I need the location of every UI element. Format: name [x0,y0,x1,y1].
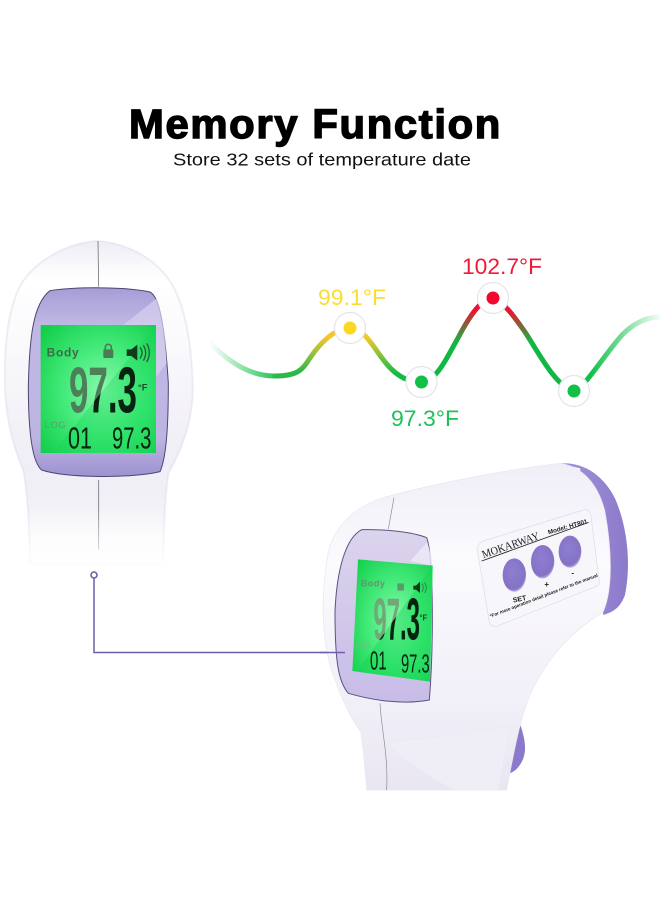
connector end over screen [320,652,345,654]
speaker icon [127,343,149,362]
degree F unit: °F [138,383,148,393]
lock icon [103,344,113,358]
marker: fourth point [558,376,590,406]
main reading: 97.3 [69,354,137,427]
body seam [380,498,394,790]
label: 102.7F: 102.7°F [462,254,542,279]
trigger [507,722,525,773]
brand underline [482,522,589,561]
control label panel [477,510,599,626]
purple rear band [560,463,628,615]
label: 97.3F: 97.3°F [391,406,459,431]
LCD lit diagonal [357,566,433,682]
degree F unit: °F [419,613,428,622]
SET button [503,558,526,592]
lock icon [397,583,404,591]
LCD label: Body: Body [47,345,79,359]
title: Memory Function [129,101,502,147]
manual note: *For more operation detail please refer to the manual [489,573,598,619]
minus button [559,536,581,568]
connector line [91,572,345,652]
speaker icon [413,582,426,593]
LCD screen [41,325,156,453]
bottom fade [0,510,210,572]
marker: 102.7F [478,282,508,314]
log index: 01 [68,422,92,456]
LOG label: LOG [45,420,66,430]
bezel glare [123,298,167,377]
front thermometer [5,241,193,563]
screen bezel [28,288,168,476]
thermometer body [5,241,193,563]
LCD screen [352,559,433,682]
plus button [531,545,554,578]
temperature curve [210,298,660,392]
thermometer body [323,463,610,790]
marker: 97.3F [406,366,437,398]
LOG label: LOG [355,641,371,650]
body seam [97,241,100,550]
angled thermometer [323,463,628,790]
bezel glare [410,542,433,566]
brand name: MOKARWAY [480,530,541,561]
LCD lit diagonal [53,325,156,453]
label: 99.1F: 99.1°F [318,285,386,310]
screen bezel [335,530,432,702]
angled thermometer: 97.3 [373,585,420,652]
grip panel [388,725,512,790]
log reading: 97.3 [112,422,151,456]
subtitle: Store 32 sets of temperature date [173,150,471,170]
minus label: - [571,569,574,578]
LCD label: Body: Body [361,579,386,589]
plus label: + [544,580,549,589]
log reading: 97.3 [401,648,430,678]
log index: 01 [370,646,387,676]
marker: 99.1F [334,312,366,344]
SET label: SET [512,595,528,605]
model number: Model: HT801 [547,518,589,536]
